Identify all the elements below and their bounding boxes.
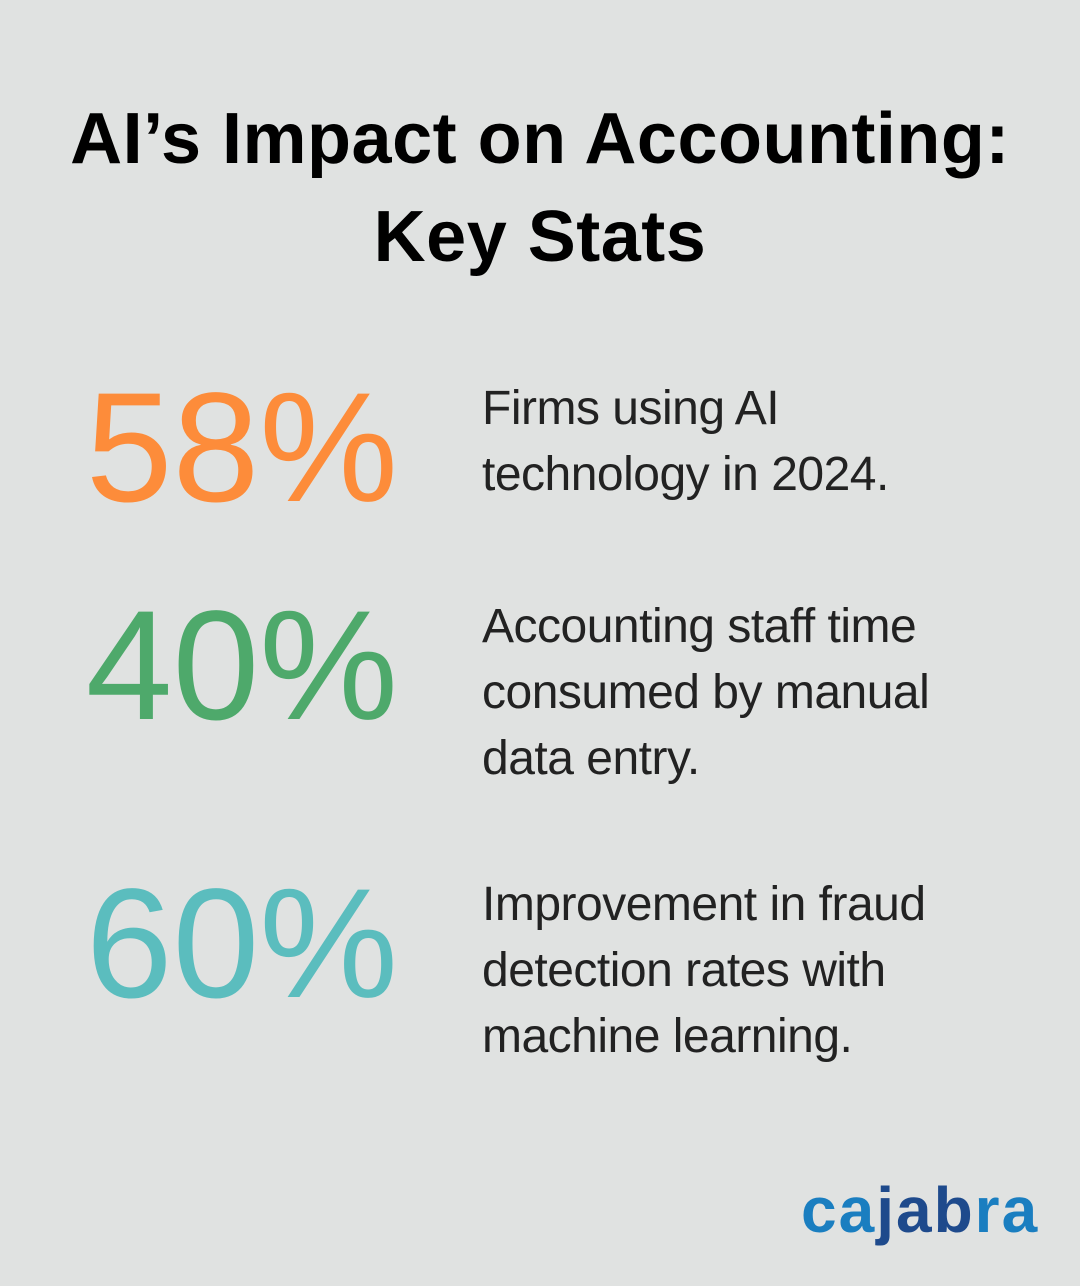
title bbox=[70, 99, 1010, 277]
text: 60%: machine learning. bbox=[482, 1010, 852, 1063]
text: 40% bbox=[482, 600, 929, 785]
text: 58%: technology in 2024. bbox=[482, 448, 889, 501]
stat: 60%: 60% bbox=[86, 857, 398, 1031]
text: 60%: Improvement in fraud bbox=[482, 878, 926, 931]
text: 40%: consumed by manual bbox=[482, 666, 929, 719]
text: 58% bbox=[482, 382, 889, 501]
text: 60%: detection rates with bbox=[482, 944, 886, 997]
logo: cajabra bbox=[801, 1174, 1039, 1246]
text: 58%: Firms using AI bbox=[482, 382, 779, 435]
stat: 58%: 58% bbox=[86, 361, 398, 535]
text: 40%: Accounting staff time bbox=[482, 600, 916, 653]
title: AI’s Impact on Accounting: bbox=[70, 99, 1010, 179]
title: Key Stats bbox=[374, 197, 706, 277]
text: 60% bbox=[482, 878, 926, 1063]
stat: 40%: 40% bbox=[86, 579, 398, 753]
text: 40%: data entry. bbox=[482, 732, 700, 785]
